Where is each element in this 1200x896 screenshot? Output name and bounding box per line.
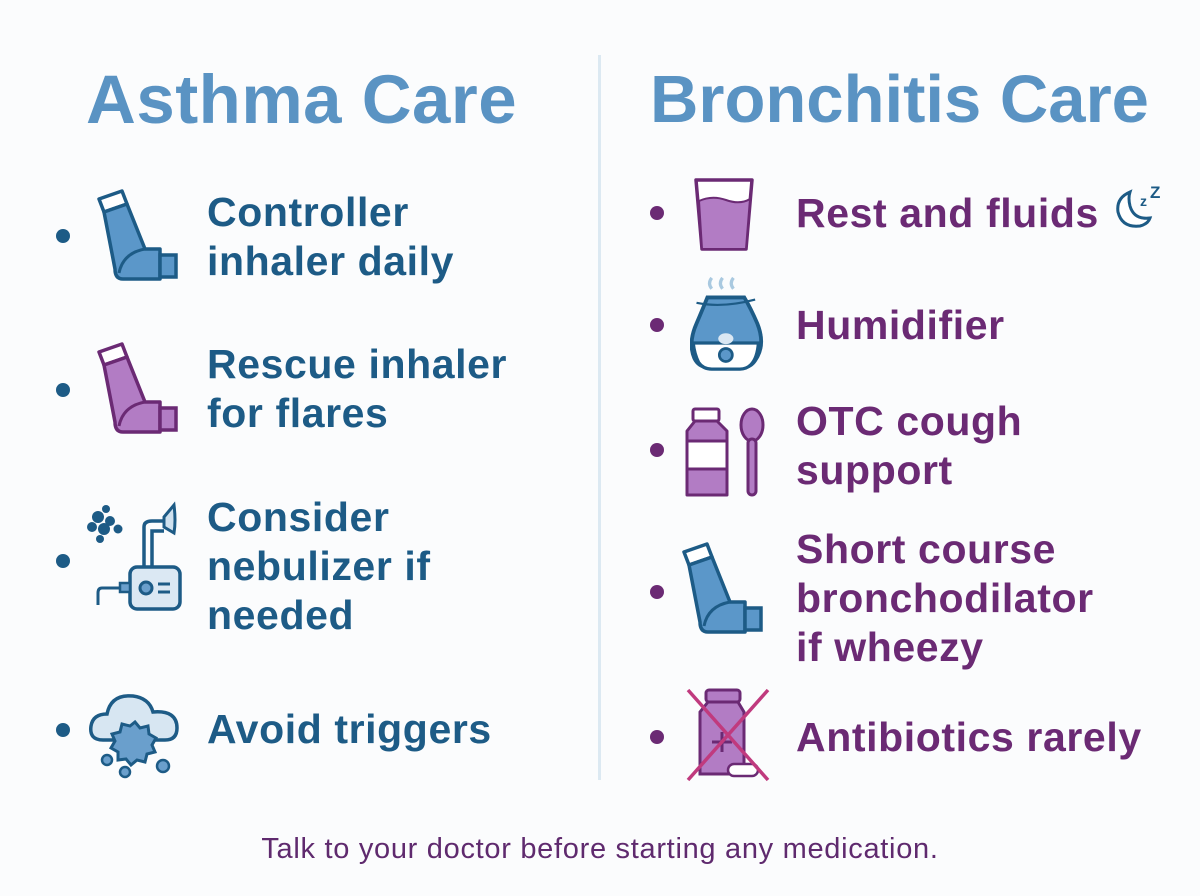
item: nebulizer: nebulizer if xyxy=(207,543,431,589)
item: humidifier xyxy=(650,277,1005,371)
item: nebulizer xyxy=(56,494,431,638)
item: bronchodilator: if wheezy xyxy=(796,624,984,670)
item: rest and fluids: Rest and fluids xyxy=(796,190,1099,236)
title: bronchitis: Bronchitis Care xyxy=(650,62,1149,137)
item: OTC cough support xyxy=(650,398,1022,496)
icon: moon zzz: z xyxy=(1140,193,1147,209)
item: antibiotics rarely xyxy=(650,688,1142,782)
icon: blue inhaler xyxy=(97,189,178,281)
item: antibiotics rarely: Antibiotics rarely xyxy=(796,714,1142,760)
item: avoid triggers: Avoid triggers xyxy=(207,706,492,752)
panel: asthma xyxy=(56,189,507,778)
item: nebulizer: Consider xyxy=(207,494,390,540)
item: bronchodilator: bronchodilator xyxy=(796,575,1094,621)
item: rescue inhaler: Rescue inhaler xyxy=(207,341,507,387)
icon: medicine bottle and spoon xyxy=(686,408,764,496)
item: controller inhaler xyxy=(56,189,454,284)
item: bronchodilator: Short course xyxy=(796,526,1056,572)
item: avoid triggers xyxy=(56,694,492,778)
footer note: Talk to your doctor before starting any medication. xyxy=(261,833,939,865)
item: OTC cough support: support xyxy=(796,447,953,493)
divider xyxy=(598,55,601,780)
panel: bronchitis xyxy=(650,178,1160,782)
item: nebulizer: needed xyxy=(207,592,354,638)
item: bronchodilator xyxy=(650,526,1094,670)
item: controller inhaler: inhaler daily xyxy=(207,238,454,284)
item: rest and fluids xyxy=(650,178,1160,251)
icon: nebulizer xyxy=(87,502,182,611)
icon: blue inhaler xyxy=(682,542,763,634)
icon: purple inhaler xyxy=(97,342,178,434)
icon: humidifier xyxy=(690,277,764,371)
item: humidifier: Humidifier xyxy=(796,302,1005,348)
icon: cloud with allergens xyxy=(89,694,179,778)
icon: glass of water xyxy=(694,178,754,251)
icon: moon zzz xyxy=(1116,184,1160,228)
item: rescue inhaler: for flares xyxy=(207,390,388,436)
item: controller inhaler: Controller xyxy=(207,189,409,235)
item: OTC cough support: OTC cough xyxy=(796,398,1022,444)
icon: crossed out pill bottle xyxy=(686,688,770,782)
title: asthma: Asthma Care xyxy=(86,61,517,138)
item: rescue inhaler xyxy=(56,341,507,436)
